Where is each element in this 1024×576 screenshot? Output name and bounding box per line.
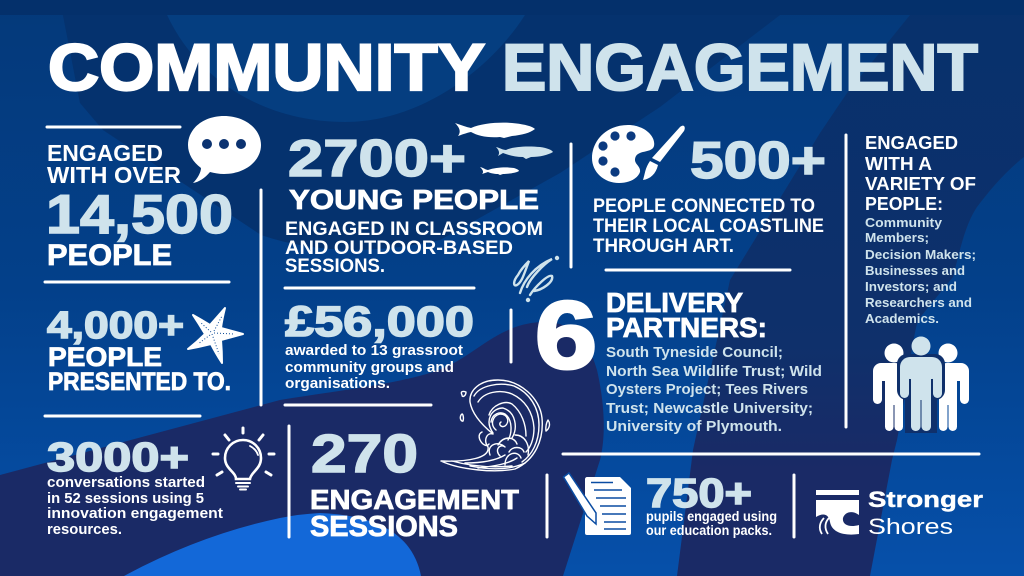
panel: 6 delivery partners: South Tyneside Council; (606, 344, 783, 361)
panel: 4,000+ people (47, 305, 231, 396)
panel: variety of people: Community (865, 215, 943, 230)
panel: variety of people: Academics. (865, 311, 939, 326)
panel: 750+ pupils: 750+ (646, 470, 752, 516)
panel: 3000+ conversations: 3000+ (47, 434, 189, 480)
panel: 2700+ young people: ENGAGED IN CLASSROOM (285, 219, 543, 240)
panel: variety of people: PEOPLE: (865, 194, 943, 214)
panel: 4,000+ people: PRESENTED TO. (48, 368, 231, 396)
panel: 3000+ conversations: resources. (47, 521, 122, 538)
panel: 270 engagement sessions: ENGAGEMENT (310, 484, 519, 515)
panel: 500+ art: THROUGH ART. (593, 236, 734, 257)
panel: 270 engagement sessions: 270 (311, 424, 418, 484)
panel: 750+ pupils (646, 470, 777, 538)
panel: 6 delivery partners: PARTNERS: (606, 312, 767, 343)
panel: 56,000 pounds awarded: £56,000 (285, 298, 474, 346)
panel: 270 engagement sessions (310, 424, 519, 543)
panel: 2700+ young people: 2700+ (288, 130, 466, 188)
panel: 500+ art: 500+ (690, 132, 826, 190)
panel: 56,000 pounds awarded: organisations. (285, 375, 390, 392)
panel: variety of people: Researchers and (865, 295, 972, 310)
panel: variety of people: Members; (865, 230, 929, 245)
panel: 3000+ conversations: conversations started (47, 474, 205, 491)
icon: group of people (873, 336, 969, 433)
panel: 500+ art: THEIR LOCAL COASTLINE (593, 216, 824, 237)
panel: 2700+ young people: AND OUTDOOR-BASED (285, 238, 513, 259)
panel: 6 delivery partners: 6 (535, 282, 597, 389)
logo: Stronger Shores (816, 487, 984, 539)
panel: 500+ art: PEOPLE CONNECTED TO (593, 196, 815, 217)
panel: 6 delivery partners: Oysters Project; Tees Rivers (606, 381, 808, 398)
panel: 6 delivery partners: North Sea Wildlife Trust; Wild (606, 363, 822, 380)
title: ENGAGEMENT (502, 30, 978, 104)
panel: 3000+ conversations (47, 434, 223, 538)
panel: 4,000+ people: 4,000+ (47, 305, 184, 347)
panel: 56,000 pounds awarded: awarded to 13 grassroot (285, 342, 463, 359)
panel: 4,000+ people: PEOPLE (48, 342, 162, 372)
panel: 500+ art (593, 132, 826, 257)
icon: fish shoal (455, 123, 553, 175)
panel: 2700+ young people: SESSIONS. (285, 256, 385, 277)
logo: Stronger Shores: Stronger (868, 487, 984, 512)
panel: 6 delivery partners (535, 282, 822, 435)
panel: variety of people: Businesses and (865, 263, 965, 278)
panel: 6 delivery partners: Trust; Newcastle University; (606, 400, 813, 417)
panel: 56,000 pounds awarded (285, 298, 474, 392)
panel: variety of people: Decision Makers; (865, 247, 976, 262)
icon: breaking wave (441, 380, 549, 471)
panel: 750+ pupils: our education packs. (646, 522, 772, 538)
panel: 270 engagement sessions: SESSIONS (310, 511, 458, 543)
icon: light bulb (213, 428, 274, 490)
panel: 14,500 people: PEOPLE (47, 239, 172, 272)
title (48, 30, 978, 104)
icon: speech bubble (188, 116, 261, 183)
panel: variety of people (865, 133, 976, 326)
panel: 3000+ conversations: innovation engagement (47, 505, 223, 522)
panel: 56,000 pounds awarded: community groups and (285, 359, 454, 376)
title: COMMUNITY (48, 30, 485, 104)
panel: variety of people: WITH A (865, 154, 932, 174)
panel: 6 delivery partners: University of Plymouth. (606, 418, 782, 435)
panel: 2700+ young people (285, 130, 543, 277)
icon: water splash (514, 257, 558, 301)
panel: variety of people: ENGAGED (865, 133, 958, 153)
icon: paint palette and brush (592, 125, 685, 183)
panel: 14,500 people: 14,500 (46, 183, 233, 245)
logo: Stronger Shores: Shores (868, 514, 953, 539)
panel: 14,500 people: WITH OVER (47, 162, 181, 188)
panel: 6 delivery partners: DELIVERY (606, 287, 743, 318)
panel: 3000+ conversations: in 52 sessions using 5 (47, 490, 204, 507)
panel: 750+ pupils: pupils engaged using (646, 508, 777, 524)
panel: 14,500 people: ENGAGED (47, 140, 163, 166)
icon: starfish (188, 308, 243, 363)
panel: 14,500 people (46, 127, 233, 272)
panel: 2700+ young people: YOUNG PEOPLE (289, 184, 539, 215)
panel: variety of people: VARIETY OF (865, 174, 976, 194)
icon: document and pencil (564, 473, 631, 535)
panel: variety of people: Investors; and (865, 279, 957, 294)
